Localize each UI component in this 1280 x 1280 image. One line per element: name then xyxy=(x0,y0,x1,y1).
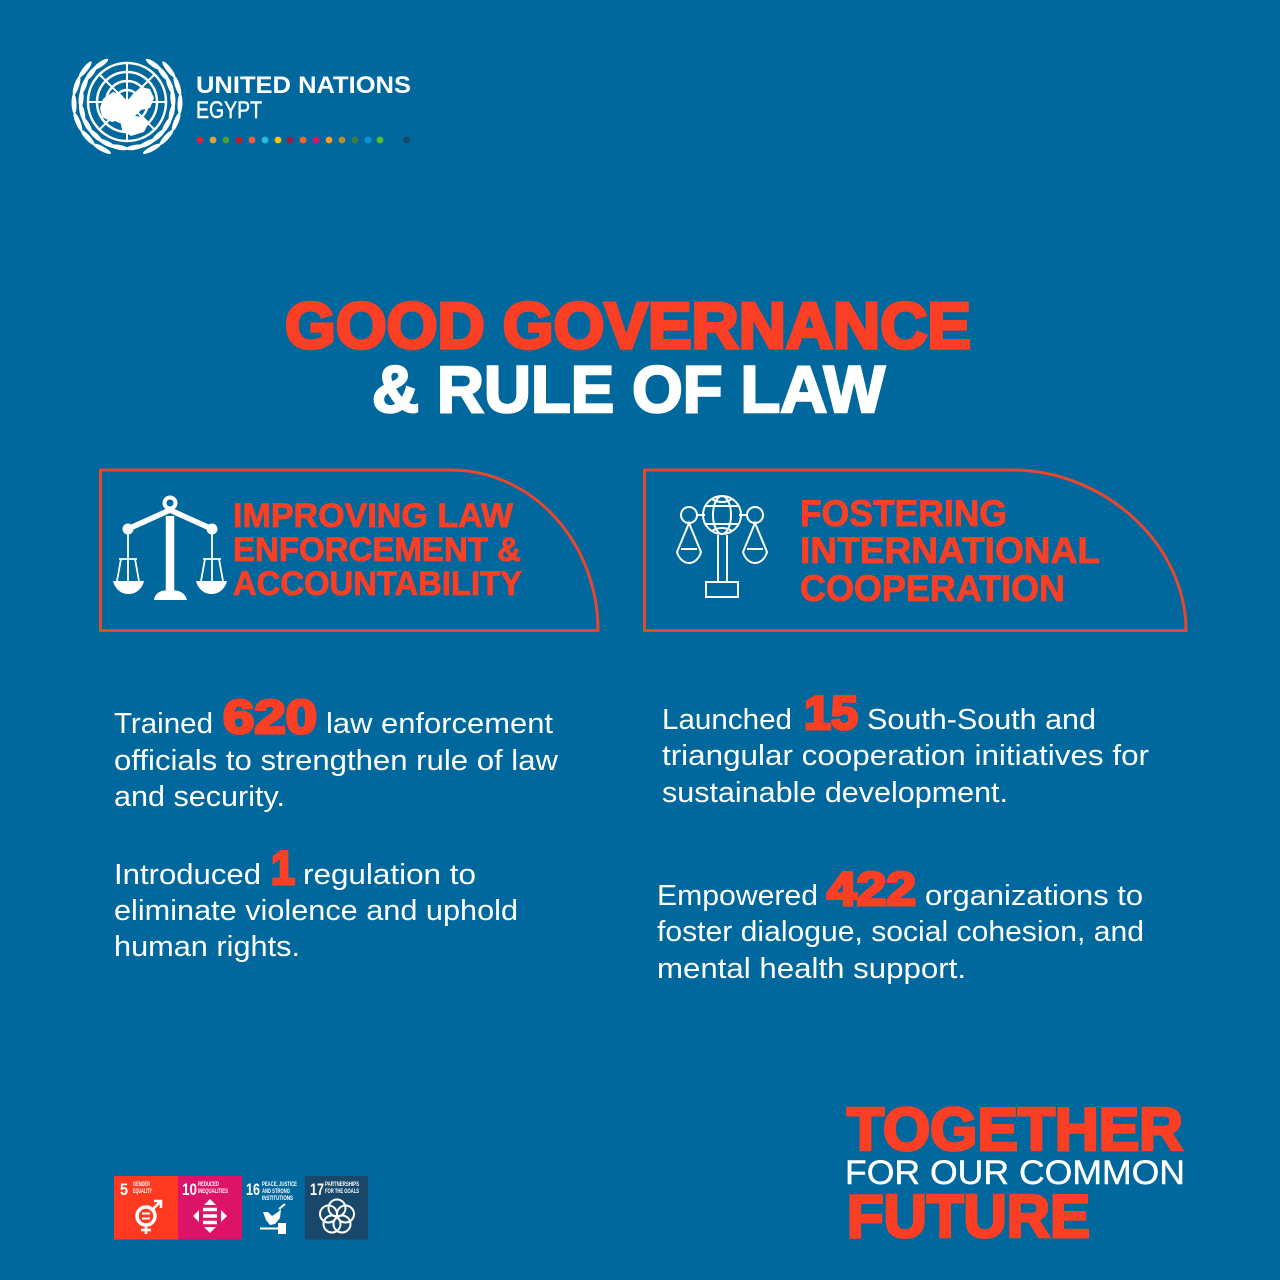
SDG colour dots xyxy=(197,137,410,143)
text block: 422 organizations: organizations to xyxy=(925,880,1143,912)
tile: SDG 16: INSTITUTIONS xyxy=(262,1196,293,1202)
panel: law enforcement banner xyxy=(100,470,598,630)
tile: SDG 17 xyxy=(305,1176,368,1240)
slogan: Together for our common future: FUTURE xyxy=(847,1183,1090,1250)
banner heading: INTERNATIONAL xyxy=(800,530,1100,571)
tile: SDG 17: 17 xyxy=(310,1180,324,1199)
logo text: Egypt: EGYPT xyxy=(196,97,262,124)
text block: 15 initiatives xyxy=(662,686,1150,809)
stat: 422: 422 xyxy=(827,862,916,915)
header: UN Egypt logo xyxy=(71,57,411,156)
tile: SDG 16 xyxy=(242,1176,305,1240)
icon: balance scales xyxy=(113,498,227,600)
slogan: Together for our common future: FOR OUR COMMON xyxy=(845,1154,1185,1192)
banner outline xyxy=(100,470,598,630)
text block: 620 officials trained: and security. xyxy=(114,781,285,813)
tile: SDG 10: INEQUALITIES xyxy=(198,1189,228,1195)
icon: UN emblem xyxy=(71,57,183,156)
tile: SDG 5: GENDER xyxy=(133,1182,150,1188)
stat: 620: 620 xyxy=(223,690,317,743)
SDG goal tiles xyxy=(114,1176,368,1240)
banner heading: ACCOUNTABILITY xyxy=(233,565,522,603)
slogan: Together for our common future: TOGETHER xyxy=(847,1096,1183,1163)
text block: 15 initiatives: sustainable development. xyxy=(662,777,1008,809)
title xyxy=(285,289,971,426)
text block: 15 initiatives: Launched xyxy=(662,704,792,736)
banner heading xyxy=(800,493,1100,609)
tile: SDG 10: REDUCED xyxy=(198,1182,219,1188)
slogan: Together for our common future xyxy=(845,1096,1185,1250)
text block: 422 organizations: foster dialogue, social cohesion, and xyxy=(657,916,1144,948)
logo text: United Nations: UNITED NATIONS xyxy=(196,72,411,99)
title line 2: & RULE OF LAW xyxy=(372,352,886,426)
text block: 1 regulation: human rights. xyxy=(114,931,300,963)
text block: 1 regulation xyxy=(114,841,518,963)
text block: 620 officials trained: officials to strengthen rule of law xyxy=(114,745,558,777)
text block: 1 regulation: eliminate violence and uphold xyxy=(114,895,518,927)
tile: SDG 17: PARTNERSHIPS xyxy=(325,1182,359,1188)
panel: international cooperation banner xyxy=(644,470,1186,630)
banner heading: IMPROVING LAW xyxy=(233,497,514,535)
banner heading: ENFORCEMENT & xyxy=(233,531,521,569)
text block: 15 initiatives: South-South and xyxy=(867,704,1096,736)
tile: SDG 16: AND STRONG xyxy=(262,1189,290,1195)
icon: globe scales xyxy=(677,496,767,597)
text block: 422 organizations xyxy=(657,862,1144,985)
text block: 620 officials trained: law enforcement xyxy=(326,708,553,740)
banner outline xyxy=(644,470,1186,630)
stat: 15: 15 xyxy=(804,686,858,739)
text block: 620 officials trained: Trained xyxy=(114,708,213,740)
tile: SDG 5 xyxy=(114,1176,178,1240)
banner heading: COOPERATION xyxy=(800,568,1065,609)
tile: SDG 5: 5 xyxy=(120,1180,128,1199)
stat: 1: 1 xyxy=(271,841,295,894)
text block: 620 officials trained xyxy=(114,690,558,813)
banner heading xyxy=(233,497,522,603)
banner heading: FOSTERING xyxy=(800,493,1007,534)
text block: 1 regulation: Introduced xyxy=(114,859,261,891)
text block: 15 initiatives: triangular cooperation initiatives for xyxy=(662,740,1150,772)
text block: 1 regulation: regulation to xyxy=(303,859,476,891)
text block: 422 organizations: mental health support. xyxy=(657,953,966,985)
tile: SDG 5: EQUALITY xyxy=(133,1189,152,1195)
text block: 422 organizations: Empowered xyxy=(657,880,818,912)
tile: SDG 10: 10 xyxy=(182,1180,197,1199)
tile: SDG 17: FOR THE GOALS xyxy=(325,1189,359,1195)
tile: SDG 16: PEACE, JUSTICE xyxy=(262,1182,297,1188)
tile: SDG 10 xyxy=(178,1176,242,1240)
title line 1: GOOD GOVERNANCE xyxy=(285,289,971,362)
tile: SDG 16: 16 xyxy=(246,1180,260,1199)
